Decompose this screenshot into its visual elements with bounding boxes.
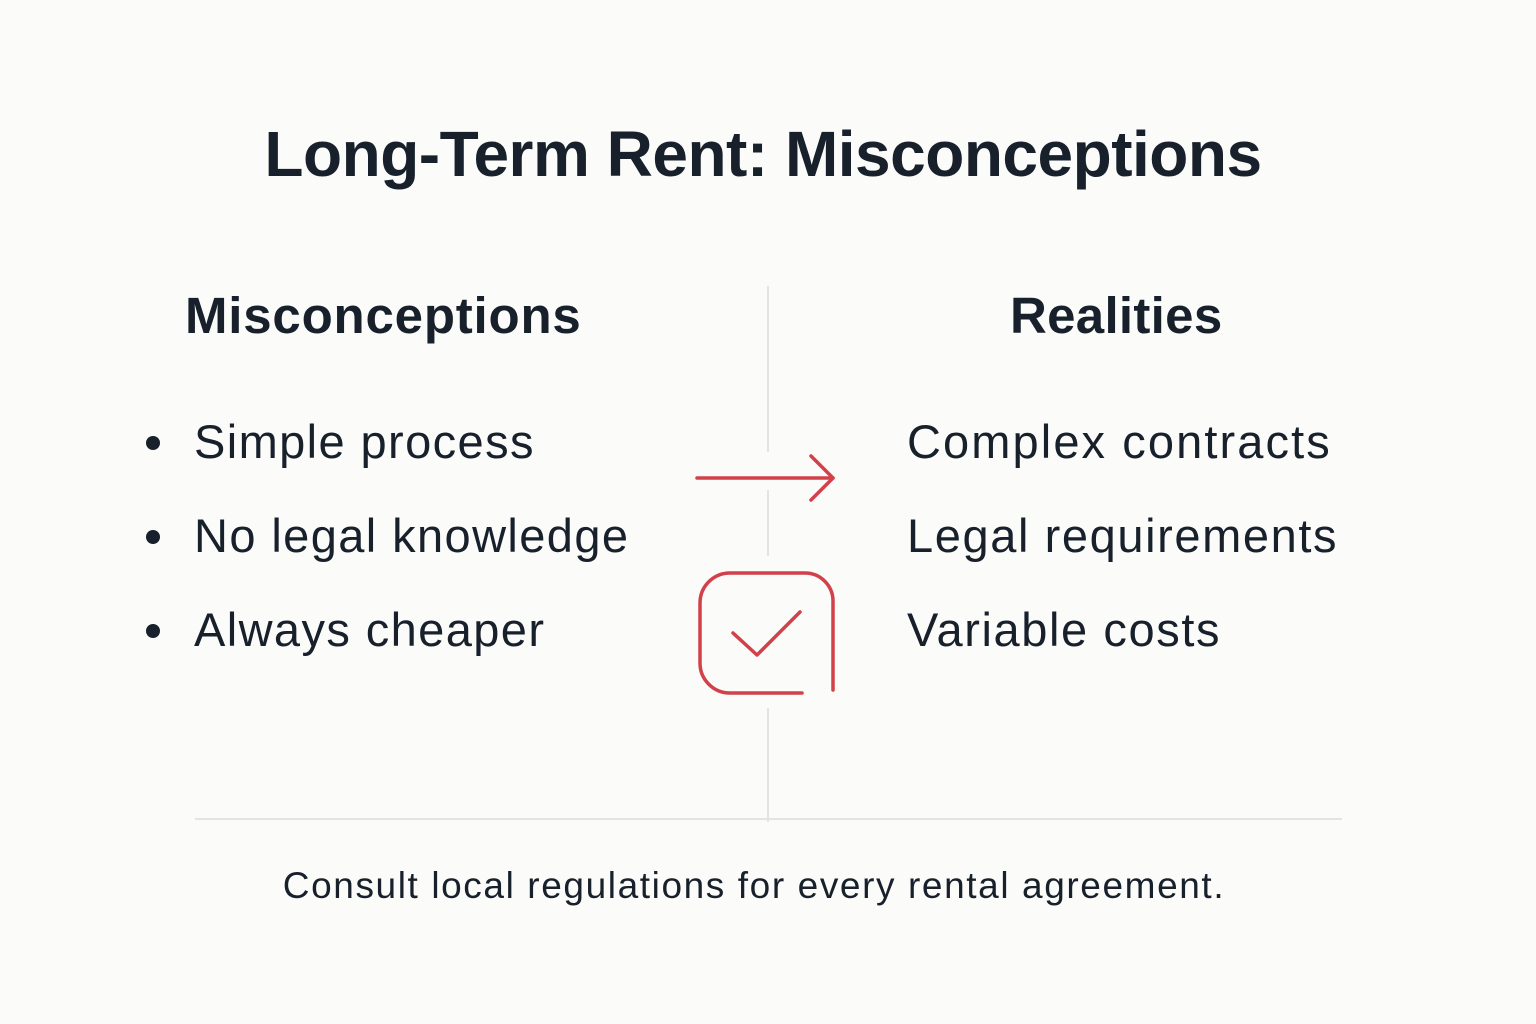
- item: legal requirements: Legal requirements: [907, 509, 1338, 562]
- item: simple process: Simple process: [194, 415, 535, 468]
- heading: realities: Realities: [1010, 287, 1222, 344]
- heading: misconceptions: Misconceptions: [185, 287, 582, 344]
- item: variable costs: Variable costs: [907, 603, 1221, 656]
- item: always cheaper: Always cheaper: [194, 603, 545, 656]
- list: misconceptions: [146, 415, 629, 656]
- item: complex contracts: Complex contracts: [907, 415, 1332, 468]
- list: realities: [907, 415, 1338, 656]
- title: Long-Term Rent: Misconceptions: [264, 118, 1262, 190]
- icon: arrow: [697, 456, 833, 500]
- icon: checkbox: [700, 573, 833, 693]
- item: no legal knowledge: No legal knowledge: [194, 509, 629, 562]
- footer note: Consult local regulations for every rental agreement.: [283, 865, 1225, 906]
